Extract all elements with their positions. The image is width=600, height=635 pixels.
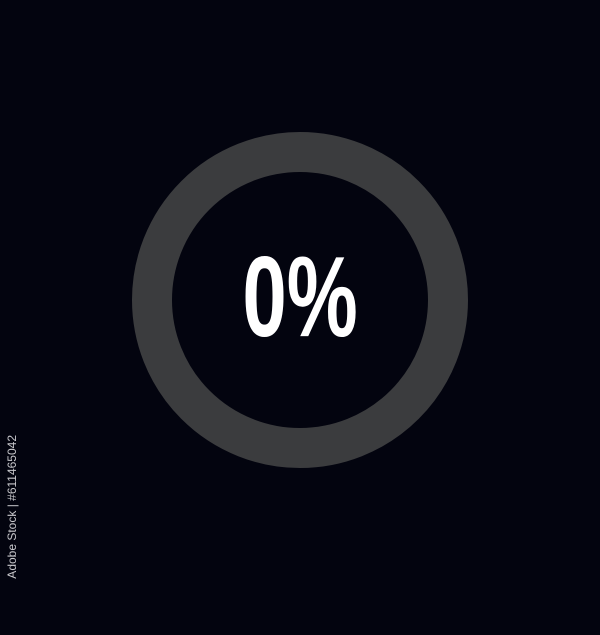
percentage label: 0% [242,234,358,361]
vertical stock id: Adobe Stock | #611465042 [5,435,19,579]
